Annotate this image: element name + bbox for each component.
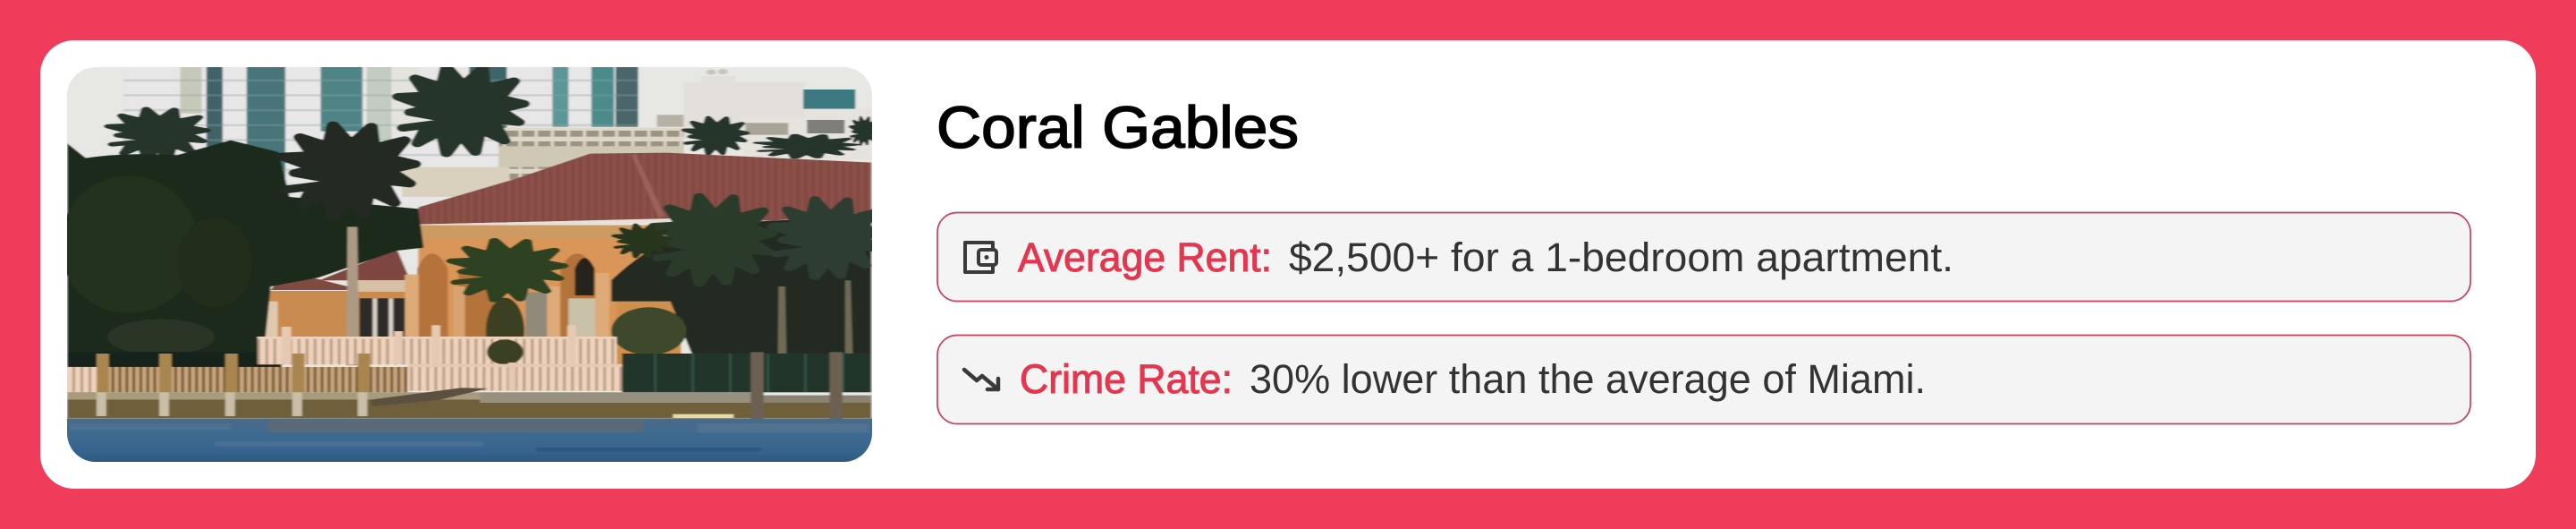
text: crime value: 30% lower than the average of Miami. [1250,356,1926,402]
background palms [108,67,877,159]
central palm [445,238,570,337]
fence [622,354,871,392]
row: average rent [937,213,2470,301]
palm with tall trunk [283,125,415,365]
large left tree mass [59,141,424,367]
photo: waterfront villa [54,63,890,466]
tall white tower with teal glass [123,67,640,185]
balcony balustrade [258,325,616,364]
right building [657,69,857,138]
row: crime rate [937,335,2470,424]
seawall [67,352,871,422]
icon: trending down [964,370,998,389]
text: rent value: $2,500+ for a 1-bedroom apartment. [1289,235,1953,280]
label: crime rate: Crime Rate: [1020,356,1233,402]
right palms and hedge [610,193,872,354]
main roof [417,153,871,227]
heading: Coral Gables [936,94,1299,160]
label: average rent: Average Rent: [1018,235,1272,280]
water [67,418,872,462]
mid-rise building [497,127,685,181]
wooden dock with posts [67,354,480,399]
waterfront railing [408,363,622,391]
tan tower base behind palms [402,167,510,197]
orange villa wall [419,226,675,338]
arches and columns [405,253,609,337]
lower wing [264,251,410,337]
icon: wallet [965,243,996,272]
